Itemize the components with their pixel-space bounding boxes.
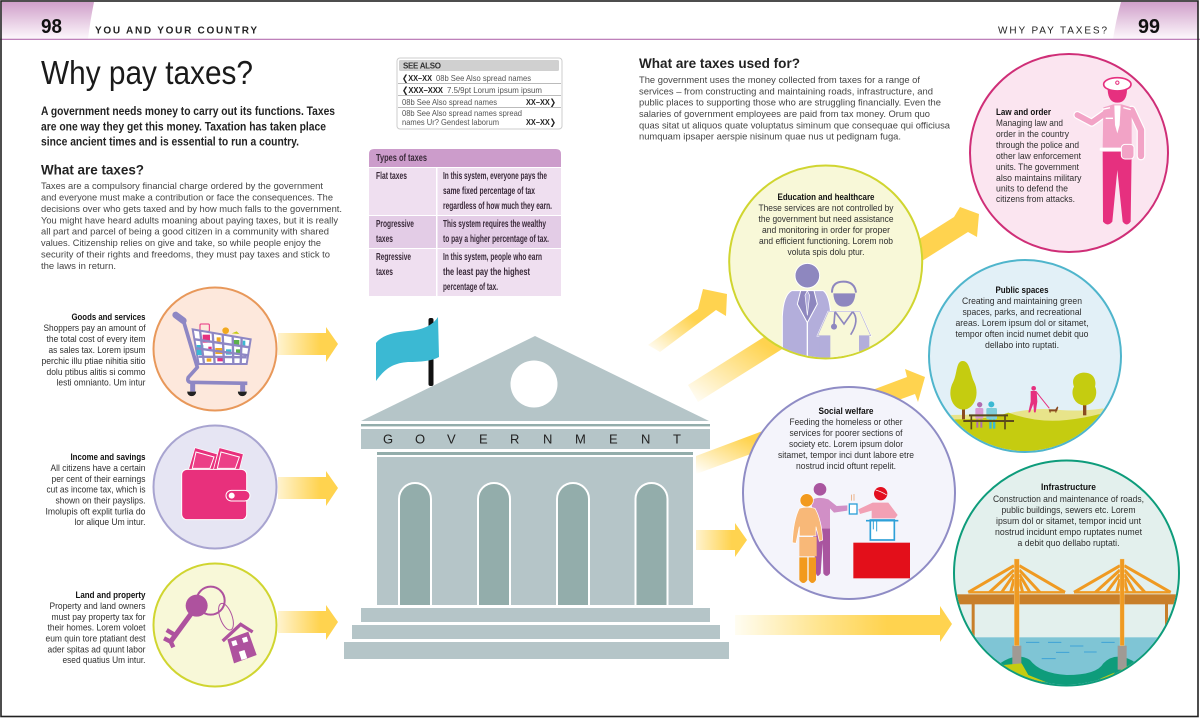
- panel: land and property circle: [154, 564, 276, 686]
- text: goods and services: lesti omnianto. Um intur: [56, 378, 146, 388]
- see also box: XX–XX❯: [526, 97, 556, 108]
- table: types of taxes: In this system, everyone pays the: [443, 170, 547, 182]
- body text: what are taxes used for: numquam ipsaper aerspie nisinum quae nus ut pedignam fuga.: [639, 132, 901, 143]
- text: goods and services: dolu ptibus alitis si commo: [46, 367, 146, 378]
- table: types of taxes: regardless of how much they earn.: [443, 200, 552, 212]
- text: law and order: Law and order: [996, 107, 1051, 118]
- panel: infrastructure: [953, 460, 1183, 695]
- heading: what are taxes used for: What are taxes used for?: [639, 55, 800, 71]
- panel: goods and services circle: [154, 288, 276, 410]
- text: law and order: through the police and: [996, 140, 1079, 151]
- see also box: ❮XXX–XXX: [402, 85, 443, 96]
- text: education and healthcare: and monitoring in order for proper: [762, 225, 890, 236]
- table: types of taxes: to pay a higher percentage of tax.: [443, 233, 549, 245]
- text: income and savings: lor alique Um intur.: [74, 517, 146, 528]
- text: law and order: also maintains military: [996, 173, 1082, 184]
- icon: flag: [376, 317, 439, 386]
- text: land and property: must pay property tax for: [52, 612, 146, 623]
- arrow: income to government: [278, 471, 338, 506]
- table: types of taxes: same fixed percentage of tax: [443, 185, 535, 197]
- text: land and property: Land and property: [76, 590, 146, 601]
- text: infrastructure: nostrud incidunt empo ruptates numet: [995, 527, 1142, 538]
- table: types of taxes: Regressive: [376, 251, 411, 263]
- see also box: [397, 58, 562, 129]
- table: types of taxes: Types of taxes: [376, 152, 427, 164]
- intro text: are one way they get this money. Taxation has taken place: [41, 120, 326, 134]
- panel: public spaces: [929, 260, 1121, 460]
- illustration: park: [950, 361, 1104, 451]
- text: education and healthcare: [758, 192, 894, 258]
- icon: police officer: [1077, 78, 1141, 224]
- arrow: horizontal to infrastructure: [735, 606, 952, 642]
- text: infrastructure: Infrastructure: [1041, 482, 1096, 493]
- text: land and property: Property and land owners: [50, 601, 146, 612]
- body text: what are taxes: Taxes are a compulsory financial charge ordered by the government: [41, 181, 323, 192]
- text: land and property: esed quatius Um intur.: [62, 655, 146, 666]
- text: social welfare: nostrud incid oftunt repelit.: [796, 461, 896, 472]
- body text: what are taxes: [41, 181, 342, 272]
- see also box: 08b See Also spread names spread: [402, 108, 522, 118]
- text: land and property: ader spitas ad quunt labor: [48, 644, 146, 656]
- panel: law and order: [970, 54, 1168, 252]
- text: education and healthcare: the government but need assistance: [758, 214, 894, 225]
- intro text: A government needs money to carry out its functions. Taxes: [41, 105, 335, 118]
- text: law and order: citizens from attacks.: [996, 194, 1075, 205]
- running head: why pay taxes: WHY PAY TAXES?: [998, 26, 1107, 36]
- body text: what are taxes used for: public places to supporting those who are struggling financially. Even the: [639, 98, 941, 109]
- body text: what are taxes used for: The government uses the money collected from taxes for a range of: [639, 75, 920, 86]
- text: infrastructure: Construction and maintenance of roads,: [993, 494, 1144, 505]
- arrow: diagonal to public spaces: [696, 369, 925, 474]
- text: goods and services: Goods and services: [72, 312, 146, 323]
- text: income and savings: per cent of their earnings: [52, 474, 146, 485]
- icon: wallet with banknotes: [182, 448, 250, 520]
- text: public spaces: [956, 285, 1088, 351]
- icon: people serving food: [792, 483, 910, 583]
- text: infrastructure: [993, 482, 1144, 549]
- panel: education and healthcare: [729, 166, 922, 361]
- text: infrastructure: a debit quo dellabo ruptati.: [1018, 538, 1120, 549]
- body text: what are taxes used for: salaries of government employees are paid from tax money. Orum quo: [639, 109, 930, 120]
- text: income and savings: Income and savings: [70, 452, 146, 463]
- text: social welfare: society etc. Lorem ipsum dolor: [789, 439, 903, 450]
- text: public spaces: dellabo into ruptati.: [985, 340, 1059, 351]
- header tab: left page: [2, 2, 94, 39]
- running head: you and your country: YOU AND YOUR COUNTRY: [95, 26, 257, 36]
- text: law and order: other law enforcement: [996, 151, 1081, 162]
- icon: shopping cart: [176, 315, 251, 396]
- text: education and healthcare: Education and healthcare: [778, 192, 874, 203]
- see also box: XX–XX❯: [526, 117, 556, 128]
- text: infrastructure: ipsum dol or sitamet, tempor incid unt: [996, 516, 1141, 527]
- text: education and healthcare: voluta spis dolu ptur.: [788, 247, 864, 258]
- see also box: ❮XX–XX: [402, 73, 432, 84]
- body text: what are taxes: and everyone must make a contribution or face the consequences. The: [41, 192, 333, 203]
- arrow: land to government: [278, 605, 338, 640]
- text: income and savings: cut as income tax, which is: [46, 484, 146, 496]
- heading: what are taxes: What are taxes?: [41, 162, 144, 178]
- text: law and order: units to defend the: [996, 184, 1068, 194]
- table: types of taxes: In this system, people who earn: [443, 251, 542, 263]
- government building: [344, 317, 729, 659]
- arrow: goods to government: [278, 327, 338, 362]
- text: public spaces: spaces, parks, and recreational: [962, 307, 1082, 318]
- body text: what are taxes used for: [639, 75, 951, 143]
- page number 98: 98: [41, 15, 62, 38]
- text: income and savings: shown on their payslips.: [56, 496, 146, 506]
- body text: what are taxes: the laws in return.: [41, 261, 116, 272]
- text: social welfare: sitamet, tempor inci dunt labore etre: [778, 450, 914, 461]
- panel: social welfare: [743, 387, 955, 599]
- body text: what are taxes: decisions over who gets taxed and by how much falls to the government.: [41, 204, 342, 215]
- text: land and property: their homes. Lorem voloet: [48, 622, 146, 634]
- table: types of taxes: Progressive: [376, 218, 414, 230]
- text: income and savings: Imolupis oft explit turlia do: [46, 506, 146, 518]
- text: social welfare: [778, 406, 914, 472]
- arrow: small diagonal to education: [648, 289, 727, 352]
- icon: key and house keyring: [164, 587, 257, 663]
- text: law and order: Managing law and: [996, 118, 1063, 129]
- text: infrastructure: public buildings, sewers etc. Lorem: [1002, 505, 1136, 516]
- table: types of taxes: Flat taxes: [376, 170, 407, 182]
- table: types of taxes: percentage of tax.: [443, 281, 498, 293]
- see also box: 08b See Also spread names: [402, 97, 497, 107]
- title: Why pay taxes?: [41, 55, 253, 92]
- body text: what are taxes: security of their rights and freedoms, they must pay taxes and stick to: [41, 249, 330, 260]
- illustration: bridge: [957, 558, 1176, 684]
- text: goods and services: perchic illu ptiae nihitia sitio: [42, 356, 146, 367]
- text: public spaces: Creating and maintaining green: [962, 296, 1082, 307]
- text: public spaces: tempor often incid numet debit quo: [956, 329, 1088, 340]
- see also box: names Ur? Gendest laborum: [402, 117, 499, 127]
- icon: official and doctor: [782, 263, 871, 361]
- label: government: GOVERNMENT: [383, 432, 681, 446]
- text: social welfare: Social welfare: [818, 406, 874, 417]
- see also box: 08b See Also spread names: [436, 73, 531, 83]
- table: types of taxes: This system requires the wealthy: [443, 218, 546, 230]
- text: public spaces: areas. Lorem ipsum dol or sitamet,: [956, 318, 1088, 329]
- body text: what are taxes: all part and parcel of being a good citizen in a community with shared: [41, 227, 329, 238]
- text: goods and services: as sales tax. Lorem ipsum: [48, 345, 146, 356]
- table: types of taxes: [369, 149, 561, 296]
- see also box: 7.5/9pt Lorum ipsum ipsum: [447, 85, 542, 95]
- text: income and savings: [46, 452, 146, 528]
- text: law and order: order in the country: [996, 129, 1069, 140]
- text: income and savings: All citizens have a certain: [50, 463, 146, 474]
- page number 99: 99: [1138, 15, 1160, 38]
- arrow: horizontal to social welfare: [696, 523, 747, 557]
- text: public spaces: Public spaces: [996, 285, 1048, 296]
- text: land and property: eum quin tore ptatiant dest: [46, 634, 146, 644]
- text: goods and services: [42, 312, 146, 388]
- text: goods and services: Shoppers pay an amount of: [44, 323, 146, 334]
- body text: what are taxes used for: services – from constructing and maintaining roads, infrastructure, and: [639, 86, 933, 97]
- text: education and healthcare: These services are not controlled by: [758, 203, 894, 214]
- panel: income and savings circle: [154, 426, 276, 548]
- table: types of taxes: taxes: [376, 233, 393, 245]
- body text: what are taxes used for: quas sitat ut aliquos quate voluptatus siminum que consequae qui officiusa: [639, 120, 951, 131]
- text: social welfare: Feeding the homeless or other: [790, 417, 902, 428]
- text: goods and services: the total cost of every item: [46, 334, 146, 345]
- header tab: right page: [1113, 2, 1198, 39]
- text: law and order: [996, 107, 1082, 205]
- intro text: [41, 105, 335, 148]
- arrow: long diagonal to law and order: [688, 207, 979, 402]
- text: social welfare: services for poorer sections of: [790, 428, 903, 439]
- see also box: SEE ALSO: [403, 62, 441, 70]
- table: types of taxes: the least pay the highest: [443, 266, 530, 278]
- body text: what are taxes: You might have heard adults moaning about paying taxes, but it is really: [41, 215, 338, 226]
- text: land and property: [46, 590, 146, 666]
- text: education and healthcare: and efficient functioning. Lorem nob: [759, 236, 893, 247]
- table: types of taxes: taxes: [376, 266, 393, 278]
- text: law and order: units. The government: [996, 162, 1079, 173]
- intro text: since ancient times and is essential to run a country.: [41, 136, 299, 148]
- body text: what are taxes: values. Citizenship relies on give and take, so while people enjoy the: [41, 238, 321, 249]
